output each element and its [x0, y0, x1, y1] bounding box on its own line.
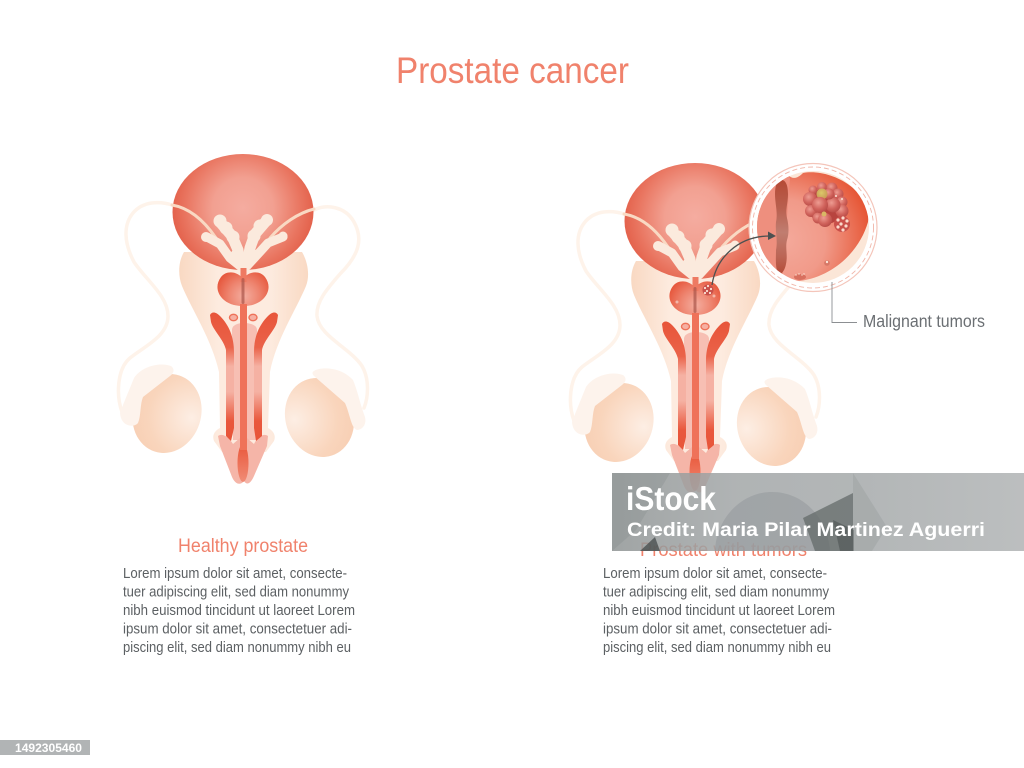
prostate tumor — [676, 284, 716, 304]
bladder — [172, 154, 314, 270]
urethra band — [775, 180, 788, 274]
figure: anatomy with tumors — [570, 163, 820, 493]
heading: prostate with tumors: Prostate with tumors — [640, 540, 807, 561]
glans core — [690, 453, 700, 491]
glans — [670, 444, 720, 493]
iStock logo: iStock — [626, 480, 717, 517]
text block: healthy: tuer adipiscing elit, sed diam nonummy — [123, 584, 350, 600]
left testis — [122, 365, 212, 462]
right epididymis — [764, 377, 817, 439]
left corpus — [210, 312, 234, 441]
text block: with tumors: ipsum dolor sit amet, consectetuer adi- — [603, 622, 832, 638]
text block: with tumors: tuer adipiscing elit, sed diam nonummy — [603, 584, 830, 600]
body outline — [179, 252, 308, 452]
central spongy tissue — [232, 323, 257, 440]
tubes inside bladder — [172, 205, 314, 238]
vas deferens tubes — [570, 212, 820, 421]
bladder — [624, 163, 766, 279]
text block: with tumors — [603, 566, 835, 656]
glans core — [238, 444, 248, 482]
right corpus — [706, 321, 730, 450]
urethra neck — [240, 268, 246, 282]
arrow to magnified view — [712, 232, 776, 285]
left corpus — [662, 321, 686, 450]
left epididymis — [572, 374, 626, 435]
urethra — [240, 304, 247, 450]
prostate — [217, 272, 269, 306]
image id tag: 1492305460 — [15, 741, 82, 755]
urethra neck — [692, 277, 698, 291]
glans — [218, 435, 268, 484]
label: malignant tumors: Malignant tumors — [863, 311, 985, 331]
right testis — [727, 378, 816, 475]
prostate — [669, 281, 721, 315]
text block: healthy: Lorem ipsum dolor sit amet, consecte- — [123, 566, 347, 582]
urethra — [692, 313, 699, 459]
magnified tissue — [755, 170, 871, 290]
text block: healthy: nibh euismod tincidunt ut laoreet Lorem — [123, 603, 355, 619]
text block: healthy: ipsum dolor sit amet, consectetuer adi- — [123, 622, 352, 638]
image id tag — [0, 740, 90, 755]
vas deferens tubes — [118, 203, 368, 412]
credit: Credit: Maria Pilar Martinez Aguerri — [627, 519, 985, 541]
bulbourethral glands — [682, 323, 709, 330]
large tumor cluster — [803, 182, 848, 227]
seminal vesicles — [201, 214, 288, 270]
text block: with tumors: nibh euismod tincidunt ut laoreet Lorem — [603, 603, 835, 619]
text block: with tumors: Lorem ipsum dolor sit amet, consecte- — [603, 566, 827, 582]
tiny tumor — [824, 260, 830, 266]
prostatic urethra — [694, 287, 696, 313]
banner background — [612, 473, 1024, 551]
small tumor cluster — [834, 216, 850, 232]
prostatic urethra — [242, 278, 244, 304]
left epididymis — [120, 364, 174, 426]
banner geometric shapes — [612, 473, 887, 551]
text block: with tumors: piscing elit, sed diam nonummy nibh eu — [603, 640, 831, 656]
central spongy tissue — [684, 332, 709, 449]
watermark banner — [612, 473, 1024, 551]
bulbourethral glands — [230, 314, 257, 321]
right testis — [275, 369, 364, 466]
tubes inside bladder — [624, 214, 766, 247]
title: Prostate cancer — [396, 50, 629, 91]
dashed ring — [752, 167, 874, 288]
left testis — [574, 374, 664, 471]
text block: healthy — [123, 566, 355, 656]
white backing ring — [749, 164, 877, 292]
bottom tumor — [794, 273, 806, 280]
seminal vesicles — [653, 223, 740, 279]
right epididymis — [312, 368, 365, 430]
text block: healthy: piscing elit, sed diam nonummy nibh eu — [123, 640, 351, 656]
right corpus — [254, 312, 278, 441]
magnified view circle — [749, 164, 877, 292]
figure: healthy anatomy — [118, 154, 368, 484]
body outline — [631, 261, 760, 461]
heading: healthy prostate: Healthy prostate — [178, 536, 308, 557]
leader line — [832, 282, 857, 322]
